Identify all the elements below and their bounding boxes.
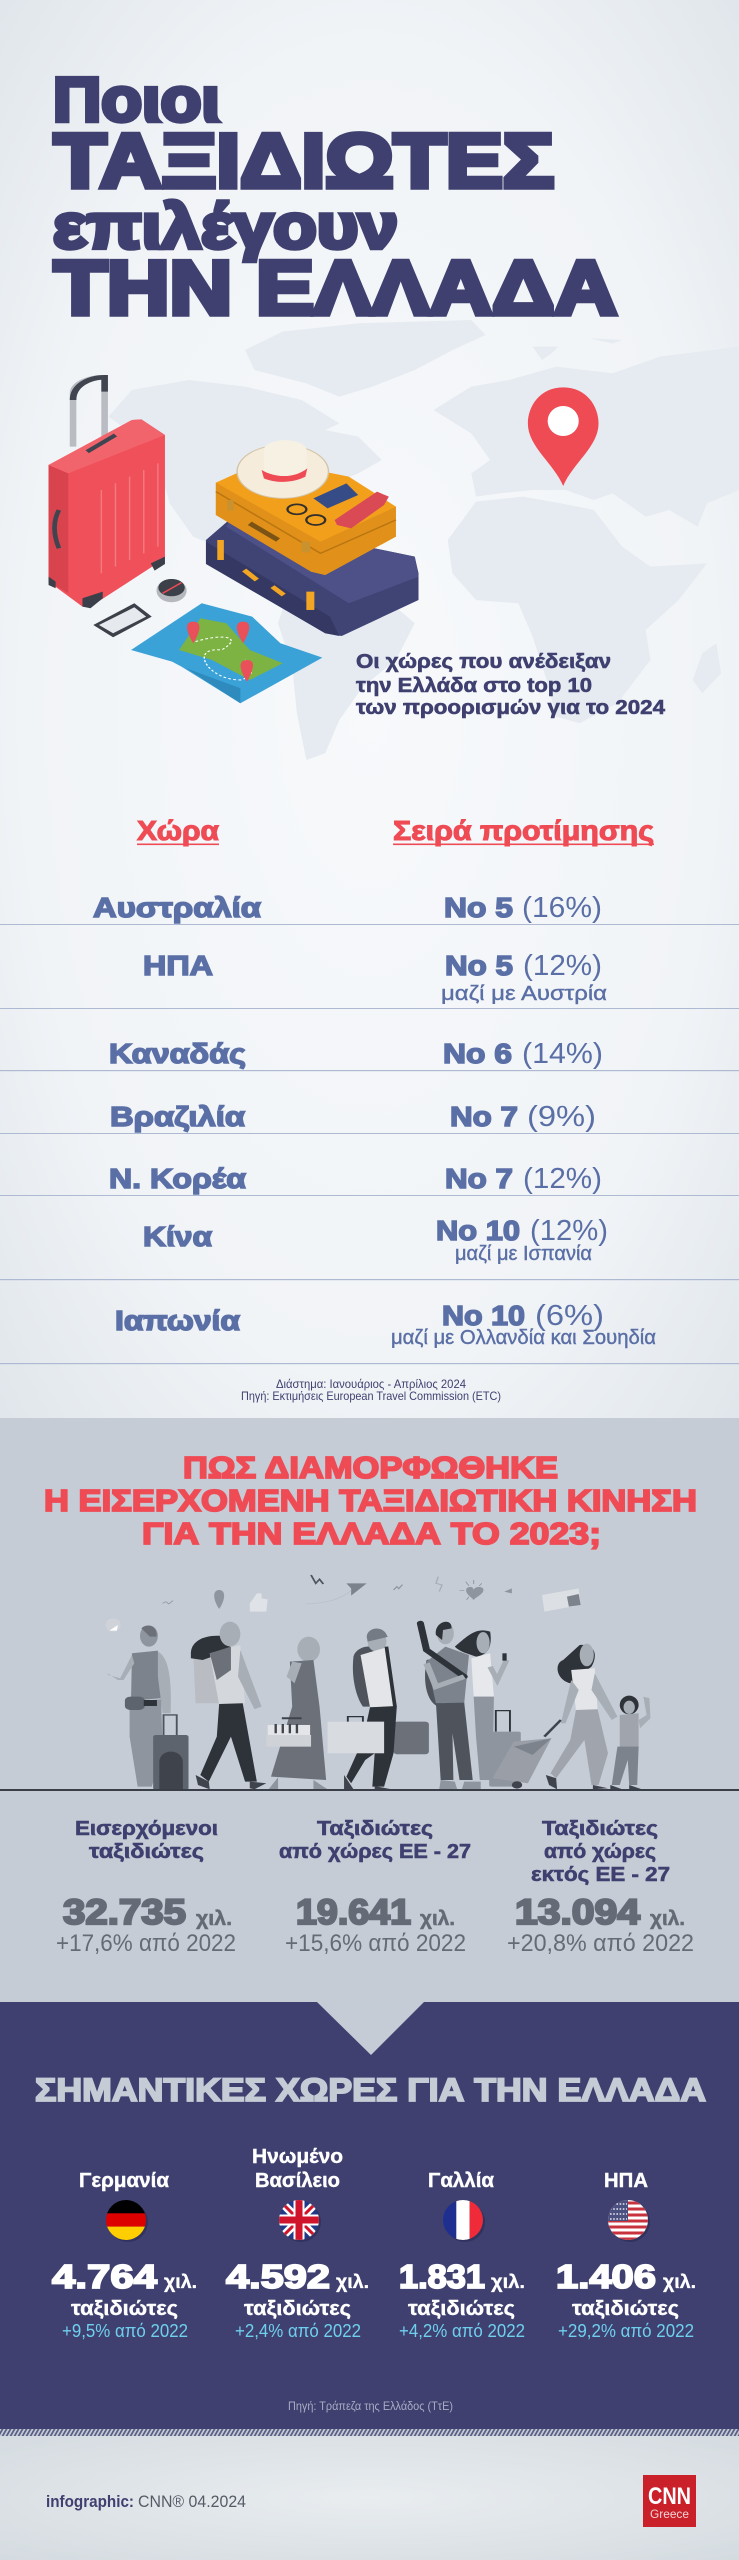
country: France: Γαλλία [428,2170,495,2192]
stat: non-EU travellers [507,1818,694,1957]
flag: Germany [106,2200,148,2242]
country: USA: χιλ. [663,2272,696,2293]
folded map [131,603,322,703]
logo: CNN Greece: Greece [650,2507,689,2521]
navy suitcase [206,518,419,636]
title [53,66,617,331]
row: South Korea: No 7 [445,1163,513,1194]
hat [237,440,328,498]
person 3 [266,1637,328,1789]
row: Australia: (16%) [522,892,602,924]
row: China [143,1215,608,1265]
country: Germany: Γερμανία [79,2170,170,2192]
child [610,1696,650,1789]
row: Brazil: (9%) [527,1101,596,1133]
red suitcase [49,377,165,608]
logo: CNN Greece [643,2475,696,2527]
source note: Bank of Greece: Πηγή: Τράπεζα της Ελλάδος (ΤτΕ) [288,2399,453,2413]
title: ΤΑΞΙΔΙΩΤΕΣ [54,119,554,204]
stat: incoming travellers: +17,6% από 2022 [56,1930,236,1957]
row: China: Κίνα [143,1221,212,1252]
person 6 [455,1630,507,1789]
person 2 [191,1622,266,1789]
country: USA [556,2170,696,2341]
tickets [335,492,389,528]
stat: non-EU travellers: Ταξιδιώτες [542,1818,658,1840]
stat: incoming travellers: Εισερχόμενοι [75,1818,218,1840]
stat: non-EU travellers: +20,8% από 2022 [507,1930,694,1957]
stat: incoming travellers: 32.735 [63,1893,186,1932]
footer band [0,2436,739,2560]
row: Australia [93,892,602,924]
stat: non-EU travellers: από χώρες [544,1841,656,1863]
flag: France [443,2200,485,2242]
arrow: section pointer [317,2002,424,2055]
table source note: Πηγή: Εκτιμήσεις European Travel Commission (ETC) [241,1389,501,1403]
illustration: travellers [106,1575,650,1790]
country: United Kingdom: Βασίλειο [255,2170,340,2192]
row: Canada: Καναδάς [109,1038,246,1069]
row: Japan: No 10 [442,1300,525,1331]
person 1 [107,1625,189,1790]
table header [137,815,654,846]
row: Japan: (6%) [535,1300,604,1332]
flag: United Kingdom [279,2200,321,2242]
row: Japan: Ιαπωνία [115,1305,240,1336]
row: Australia: No 5 [444,892,513,923]
row: USA: (12%) [523,950,602,982]
row: USA: No 5 [445,950,513,981]
row: USA [143,950,607,1005]
stat: EU-27 travellers: Ταξιδιώτες [317,1818,433,1840]
title: Ποιοι [53,66,220,135]
row: Brazil [110,1101,596,1133]
row: Japan: μαζί με Ολλανδία και Σουηδία [391,1327,656,1349]
heading: inbound traffic: ΠΩΣ ΔΙΑΜΟΡΦΩΘΗΚΕ [183,1450,558,1485]
row: USA: ΗΠΑ [143,950,213,981]
intro text: την Ελλάδα στο top 10 [356,675,592,697]
country: Germany: χιλ. [164,2272,197,2293]
heading: key countries: ΣΗΜΑΝΤΙΚΕΣ ΧΩΡΕΣ ΓΙΑ ΤΗΝ ΕΛΛΑΔΑ [35,2072,706,2108]
stat: EU-27 travellers: 19.641 [296,1893,411,1932]
ground line [0,1789,739,1791]
sunglasses [287,504,325,525]
row: Brazil: No 7 [450,1101,518,1132]
title: επιλέγουν [53,192,398,262]
row: Canada [109,1038,603,1070]
logo: CNN Greece: CNN [648,2483,691,2510]
row: South Korea [109,1163,602,1195]
row: South Korea: (12%) [523,1163,602,1195]
person 7 [546,1644,617,1789]
heading: inbound traffic: ΓΙΑ ΤΗΝ ΕΛΛΑΔΑ ΤΟ 2023; [142,1516,601,1551]
country: USA: 1.406 [556,2258,656,2295]
stat: incoming travellers: χιλ. [196,1908,232,1930]
country: France [399,2170,525,2341]
table header: Σειρά προτίμησης [393,815,654,846]
stat: non-EU travellers: 13.094 [515,1893,641,1932]
row: Brazil: Βραζιλία [110,1101,245,1132]
country: United Kingdom: χιλ. [336,2272,369,2293]
footer credit: CNN® 04.2024 [138,2492,246,2511]
country: France: 1.831 [399,2258,485,2295]
row: USA: μαζί με Αυστρία [441,983,607,1005]
row: Canada: (14%) [522,1038,603,1070]
country: United Kingdom: Ηνωμένο [252,2146,343,2168]
small travel icons [106,1575,581,1632]
flag: USA [608,2200,650,2242]
stat: EU-27 travellers: από χώρες ΕΕ - 27 [279,1841,471,1863]
stat: EU-27 travellers [279,1818,471,1957]
table row lines [0,924,739,1364]
country: USA: +29,2% από 2022 [558,2321,694,2341]
stat: EU-27 travellers: χιλ. [420,1908,455,1930]
country: Germany: ταξιδιώτες [71,2298,178,2320]
row: China: No 10 [436,1215,520,1246]
country: United Kingdom [226,2146,369,2341]
title: ΤΗΝ ΕΛΛΑΔΑ [54,246,617,331]
table source note [241,1377,501,1403]
country: United Kingdom: +2,4% από 2022 [235,2321,361,2341]
stat: non-EU travellers: χιλ. [650,1908,685,1930]
heading: inbound traffic [44,1450,697,1551]
footer credit [46,2492,246,2511]
stat: incoming travellers: ταξιδιώτες [89,1841,204,1863]
page background [0,0,739,1418]
country: United Kingdom: ταξιδιώτες [244,2298,351,2320]
table header: Χώρα [137,815,219,846]
illustration: luggage and map [49,377,419,703]
country: Germany: 4.764 [52,2258,158,2295]
row: China: μαζί με Ισπανία [455,1243,592,1265]
heading: inbound traffic: Η ΕΙΣΕΡΧΟΜΕΝΗ ΤΑΞΙΔΙΩΤΙΚΗ ΚΙΝΗΣΗ [44,1483,697,1518]
world map backdrop [108,320,739,760]
intro text: Οι χώρες που ανέδειξαν [356,651,611,673]
country: USA: ταξιδιώτες [572,2298,679,2320]
stat: EU-27 travellers: +15,6% από 2022 [285,1930,466,1957]
country: Germany: +9,5% από 2022 [62,2321,188,2341]
row: China: (12%) [530,1215,608,1247]
footer credit: infographic: [46,2492,134,2511]
row: South Korea: Ν. Κορέα [109,1163,246,1194]
row: Australia: Αυστραλία [93,892,261,923]
person 4 [328,1629,429,1789]
orange suitcase [216,460,396,575]
passport [313,483,358,508]
country: France: +4,2% από 2022 [399,2321,525,2341]
person 5 with guitar [420,1622,473,1789]
row: Canada: No 6 [443,1038,512,1069]
smartphone [93,603,152,637]
compass [156,579,187,602]
country: United Kingdom: 4.592 [226,2258,330,2295]
stat: non-EU travellers: εκτός ΕΕ - 27 [531,1864,670,1886]
intro text: των προορισμών για το 2024 [356,697,666,719]
row: Japan [115,1300,656,1349]
country: France: ταξιδιώτες [408,2298,515,2320]
roller bag [489,1711,561,1789]
icon: red map pin [528,387,599,486]
panel: inbound traffic [0,1418,739,2004]
stat: incoming travellers [56,1818,236,1957]
table source note: Διάστημα: Ιανουάριος - Απρίλιος 2024 [276,1377,466,1391]
intro text [356,651,666,719]
country: Germany [52,2170,197,2341]
country: France: χιλ. [491,2272,525,2293]
panel: key countries [0,2002,739,2429]
country: USA: ΗΠΑ [604,2170,648,2192]
